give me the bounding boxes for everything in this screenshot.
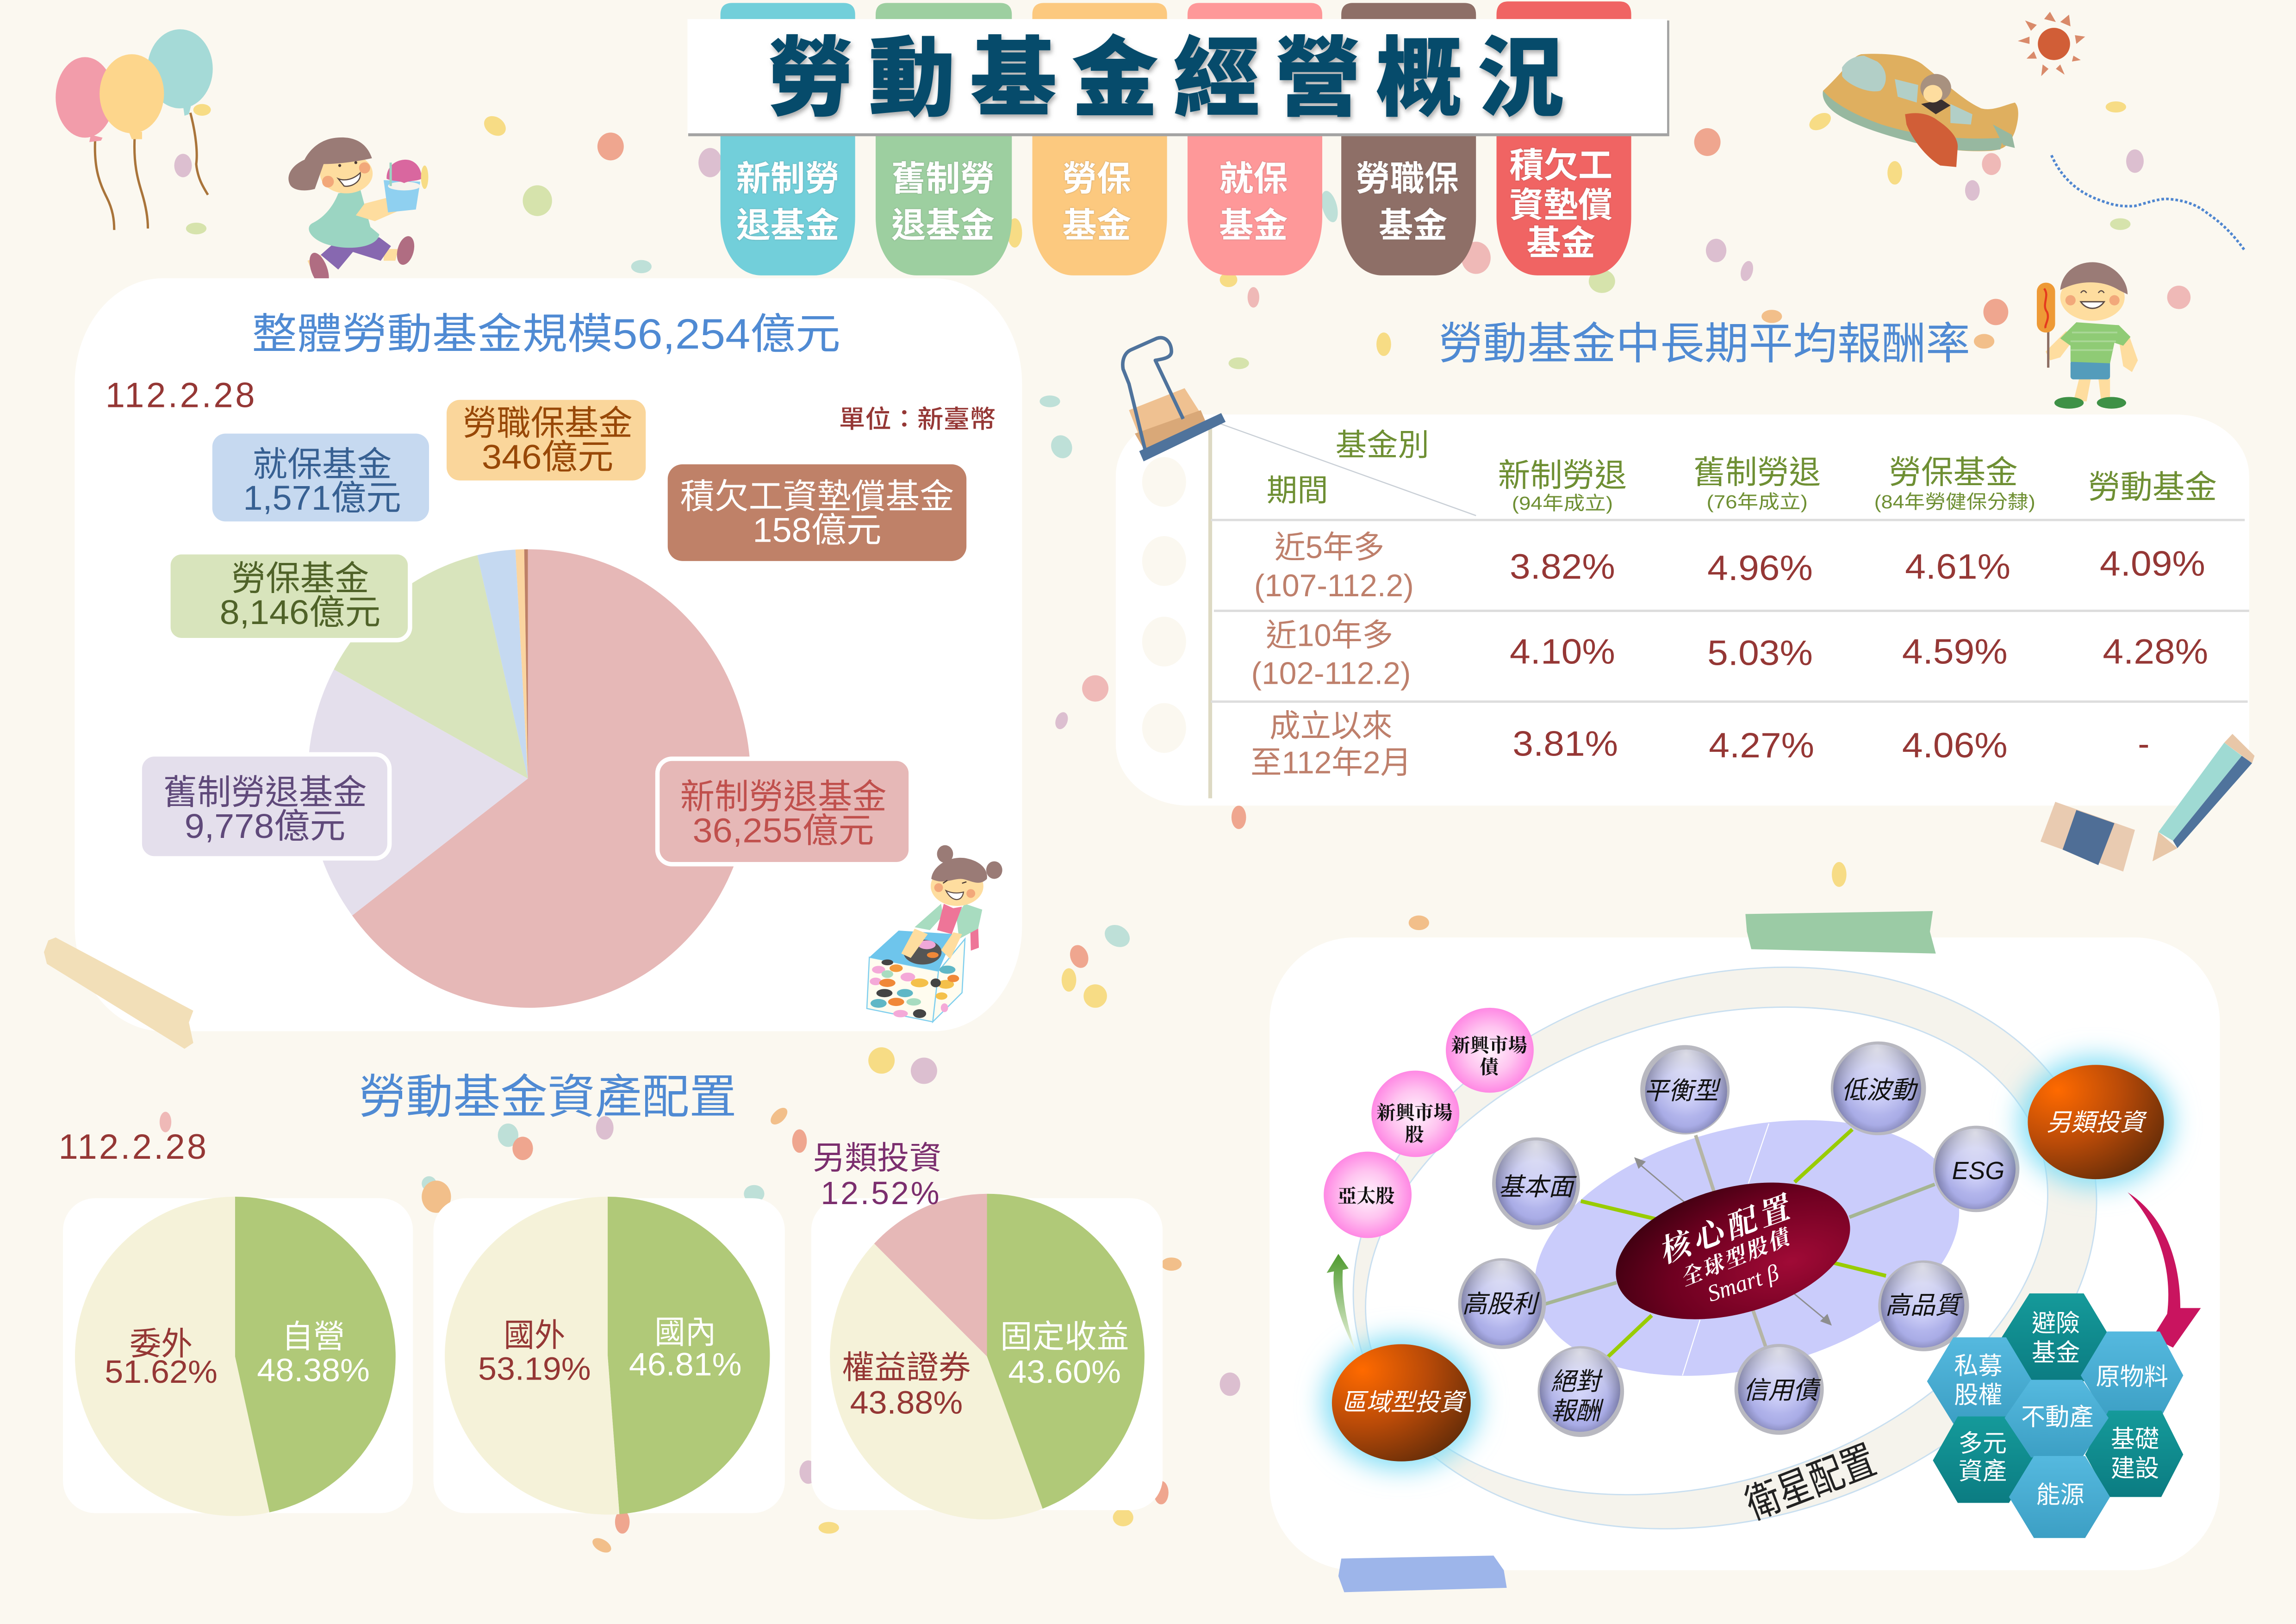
tab: wage arrears fund: 基金 (1526, 224, 1595, 262)
panel: asset allocation A (63, 1198, 413, 1513)
icon: pencil (2153, 734, 2254, 861)
core label (1601, 1159, 1865, 1343)
row: since inception (1251, 709, 2150, 781)
node: emerging market equities: 新興市場 (1376, 1102, 1453, 1123)
category tabs (721, 1, 1631, 275)
row: last ten years: (102-112.2) (1251, 656, 1411, 691)
label: employment insurance (212, 434, 429, 521)
row: last ten years (1251, 618, 2208, 691)
pie chart: domestic vs foreign: 國內 (654, 1314, 716, 1350)
core label: Smart β (1704, 1259, 1782, 1307)
core label: 全球型股債 (1677, 1224, 1795, 1290)
pie chart: asset classes (830, 1194, 1145, 1519)
node: emerging market bonds: 新興市場 (1451, 1035, 1527, 1056)
row: since inception: 4.27% (1709, 726, 1814, 765)
hex: multi asset: 資產 (1959, 1458, 2007, 1485)
bubble: fundamental (1492, 1137, 1580, 1230)
row: last five years: 4.09% (2100, 544, 2205, 583)
hex: multi asset: 多元 (1959, 1430, 2007, 1457)
node: regional investment (1324, 1337, 1479, 1469)
pie chart: in-house vs outsourced: 48.38% (257, 1352, 370, 1388)
tab: old labor pension (876, 3, 1012, 275)
pie chart: in-house vs outsourced: 委外 (130, 1326, 193, 1362)
label: new labor pension (658, 759, 911, 864)
bubble: fundamental: 基本面 (1499, 1173, 1577, 1201)
tab: new labor pension: 新制勞 (736, 159, 840, 198)
tab: employment insurance: 基金 (1219, 206, 1288, 245)
tab: employment insurance (1188, 3, 1322, 275)
label: labor insurance (168, 552, 410, 640)
heading: returns: 勞動基金中長期平均報酬率 (1439, 319, 1970, 369)
row: last five years: (107-112.2) (1254, 568, 1414, 603)
table headers: 期間 (1267, 474, 1328, 508)
icon: dotted flight path (2052, 155, 2245, 250)
hex: infrastructure: 建設 (2111, 1455, 2159, 1482)
label: employment insurance: 就保基金 (253, 445, 392, 483)
row: last five years: 3.82% (1510, 547, 1615, 587)
hex: commodities: 原物料 (2096, 1364, 2168, 1391)
row: since inception: 4.06% (1902, 726, 2008, 765)
tab: occupational accident insurance (1341, 3, 1476, 275)
core lavender ellipse (1507, 1079, 1986, 1417)
arrow: regional to equities (1326, 1254, 1356, 1352)
tab: wage arrears fund (1497, 1, 1631, 275)
row: since inception: - (2138, 725, 2150, 764)
pie chart: fund scale (308, 550, 751, 1008)
pie chart: asset classes: 權益證券 (842, 1349, 971, 1385)
bubble: credit: 信用債 (1743, 1377, 1821, 1405)
panel: total fund scale (75, 278, 1022, 1031)
pie chart: domestic vs foreign: 53.19% (478, 1351, 591, 1387)
bubble: absolute return: 絕對 (1551, 1368, 1603, 1396)
pie chart: in-house vs outsourced (75, 1197, 396, 1516)
label: occupational insurance: 346億元 (482, 437, 614, 476)
hex: real estate: 不動產 (2021, 1404, 2094, 1431)
hex: infrastructure: 基礎 (2111, 1426, 2159, 1453)
table headers: 勞動基金 (2088, 469, 2217, 505)
node: alternative investment: 另類投資 (2047, 1109, 2147, 1137)
bubble: absolute return (1537, 1346, 1624, 1437)
tape: panel corner left (44, 937, 193, 1049)
pie chart: domestic vs foreign (445, 1197, 770, 1515)
title banner (687, 19, 1669, 136)
satellite ring (1289, 887, 2160, 1609)
icon: sun (2018, 12, 2085, 76)
pie chart: asset classes: 固定收益 (1000, 1318, 1129, 1355)
core label: 核心配置 (1654, 1190, 1798, 1270)
icon: eraser (2041, 802, 2135, 872)
label: wage arrears: 積欠工資墊償基金 (680, 477, 954, 516)
tab: old labor pension: 退基金 (891, 206, 995, 245)
table headers: 舊制勞退 (1693, 454, 1821, 490)
row: last ten years: 4.59% (1902, 632, 2008, 671)
tab: labor insurance (1033, 3, 1167, 275)
bubble: high quality (1878, 1261, 1969, 1351)
label: alternative investment (813, 1140, 941, 1211)
label: occupational insurance: 勞職保基金 (463, 404, 633, 443)
hexagon cluster (1927, 1293, 2183, 1538)
row: last five years: 近5年多 (1275, 530, 1384, 565)
icon: binder clip (1123, 337, 1226, 462)
node: Asia Pacific equities (1324, 1152, 1412, 1238)
icon: girl with shaved ice (288, 137, 428, 289)
tab: new labor pension (721, 3, 855, 275)
bubble: ESG (1933, 1126, 2019, 1212)
title: 勞動基金經營概況 (767, 30, 1579, 127)
pie chart: domestic vs foreign: 46.81% (629, 1346, 742, 1382)
tab: employment insurance: 就保 (1219, 159, 1288, 198)
diagram: core satellite allocation (1289, 887, 2201, 1609)
node: alternative investment (2020, 1057, 2172, 1187)
table headers: 勞保基金 (1889, 454, 2018, 490)
node: Asia Pacific equities: 亞太股 (1338, 1186, 1395, 1207)
hex: commodities (2081, 1331, 2183, 1419)
hex: energy (2009, 1456, 2110, 1538)
label: alternative investment: 12.52% (821, 1175, 940, 1211)
bubble: high dividend: 高股利 (1462, 1290, 1540, 1318)
panel: asset allocation B (434, 1198, 785, 1513)
pie chart: in-house vs outsourced: 自營 (282, 1318, 345, 1355)
hex: infrastructure (2085, 1411, 2183, 1497)
row: since inception: 成立以來 (1269, 709, 1393, 744)
tape: diagram bottom (1338, 1555, 1507, 1592)
unit note: 單位：新臺幣 (839, 406, 996, 433)
pie chart: asset classes: 43.88% (850, 1384, 963, 1420)
pie chart: in-house vs outsourced: 51.62% (105, 1354, 218, 1390)
table headers: (84年勞健保分隸) (1874, 491, 2035, 512)
label: labor insurance: 8,146億元 (220, 593, 381, 631)
heading: total scale: 整體勞動基金規模56,254億元 (252, 311, 840, 358)
hex: energy: 能源 (2036, 1481, 2084, 1508)
bubble: ESG: ESG (1952, 1157, 2004, 1185)
tab: wage arrears fund: 資墊償 (1509, 186, 1612, 224)
confetti dots (160, 101, 2190, 1555)
hex: private equity: 股權 (1954, 1382, 2003, 1409)
label: old labor pension: 舊制勞退基金 (163, 773, 367, 812)
row: since inception: 3.81% (1512, 725, 1618, 764)
icon: airplane (1823, 54, 2018, 167)
table: returns (1142, 420, 2249, 798)
hex: hedge funds: 避險 (2032, 1310, 2080, 1337)
label: old labor pension: 9,778億元 (185, 807, 346, 845)
label: alternative investment: 另類投資 (813, 1140, 941, 1176)
tab: occupational accident insurance: 勞職保 (1356, 159, 1459, 198)
arrow: alternative to hexagons (2128, 1193, 2201, 1348)
panel: returns table background (1116, 414, 2249, 806)
hex: private equity: 私募 (1954, 1353, 2003, 1380)
label: occupational insurance (447, 400, 646, 481)
node: regional investment: 區域型投資 (1342, 1389, 1467, 1416)
tab: wage arrears fund: 積欠工 (1509, 146, 1612, 185)
hex: hedge funds (2002, 1293, 2110, 1381)
hex: private equity (1927, 1337, 2032, 1424)
bubble: high dividend (1458, 1258, 1546, 1349)
tape: diagram top (1745, 911, 1936, 954)
tab: old labor pension: 舊制勞 (891, 159, 995, 198)
bubble: credit (1735, 1344, 1824, 1435)
notebook holes (1142, 457, 1186, 753)
heading: asset allocation: 勞動基金資產配置 (359, 1071, 736, 1124)
label: satellite allocation: 衛星配置 (1740, 1437, 1882, 1528)
row: last ten years: 4.10% (1510, 632, 1615, 671)
node: emerging market equities (1371, 1071, 1459, 1157)
tab: labor insurance: 勞保 (1062, 159, 1131, 198)
row: since inception: 至112年2月 (1251, 745, 1412, 781)
label: new labor pension: 36,255億元 (693, 811, 874, 849)
bubble: low volatility (1831, 1042, 1926, 1135)
label: labor insurance: 勞保基金 (231, 559, 369, 598)
icon: boy with corn dog (2037, 262, 2138, 409)
label: wage arrears (668, 464, 966, 561)
connector lines (1539, 1124, 1935, 1375)
panel: core satellite diagram background (1269, 937, 2220, 1570)
label: new labor pension: 新制勞退基金 (680, 778, 887, 816)
icon: girl with candy box (867, 845, 1002, 1022)
table headers: (94年成立) (1512, 493, 1613, 514)
icon: balloons (56, 29, 213, 230)
bubble: balanced (1640, 1045, 1730, 1135)
hex: hedge funds: 基金 (2032, 1339, 2080, 1366)
hex: multi asset (1933, 1417, 2035, 1503)
tab: labor insurance: 基金 (1062, 206, 1131, 245)
row: last five years: 4.61% (1905, 547, 2010, 587)
pie chart: domestic vs foreign: 國外 (504, 1317, 565, 1353)
bubble: balanced: 平衡型 (1644, 1077, 1721, 1105)
label: old labor pension (140, 754, 390, 858)
row: last five years (1254, 530, 2205, 603)
node: emerging market bonds: 債 (1480, 1056, 1501, 1078)
node: emerging market bonds (1446, 1008, 1534, 1093)
bubble: high quality: 高品質 (1885, 1292, 1963, 1319)
label: wage arrears: 158億元 (753, 511, 882, 550)
pie chart: asset classes: 43.60% (1008, 1354, 1121, 1390)
table headers: 新制勞退 (1498, 457, 1627, 493)
row: last ten years: 5.03% (1707, 633, 1813, 673)
panel: asset allocation C (811, 1198, 1163, 1510)
row: last five years: 4.96% (1707, 549, 1813, 588)
row: last ten years: 近10年多 (1266, 618, 1393, 653)
label: employment insurance: 1,571億元 (243, 479, 401, 517)
bubble: absolute return: 報酬 (1551, 1397, 1604, 1425)
tab: occupational accident insurance: 基金 (1379, 206, 1448, 245)
row: last ten years: 4.28% (2103, 632, 2208, 671)
date: total scale: 112.2.28 (106, 376, 255, 415)
tab: new labor pension: 退基金 (736, 206, 840, 245)
hex: real estate (2004, 1380, 2109, 1457)
bubble: low volatility: 低波動 (1842, 1076, 1918, 1104)
table headers: 基金別 (1335, 428, 1429, 462)
date: asset allocation: 112.2.28 (59, 1127, 206, 1167)
node: emerging market equities: 股 (1405, 1124, 1424, 1145)
table headers (1267, 428, 2217, 514)
table headers: (76年成立) (1707, 491, 1808, 512)
